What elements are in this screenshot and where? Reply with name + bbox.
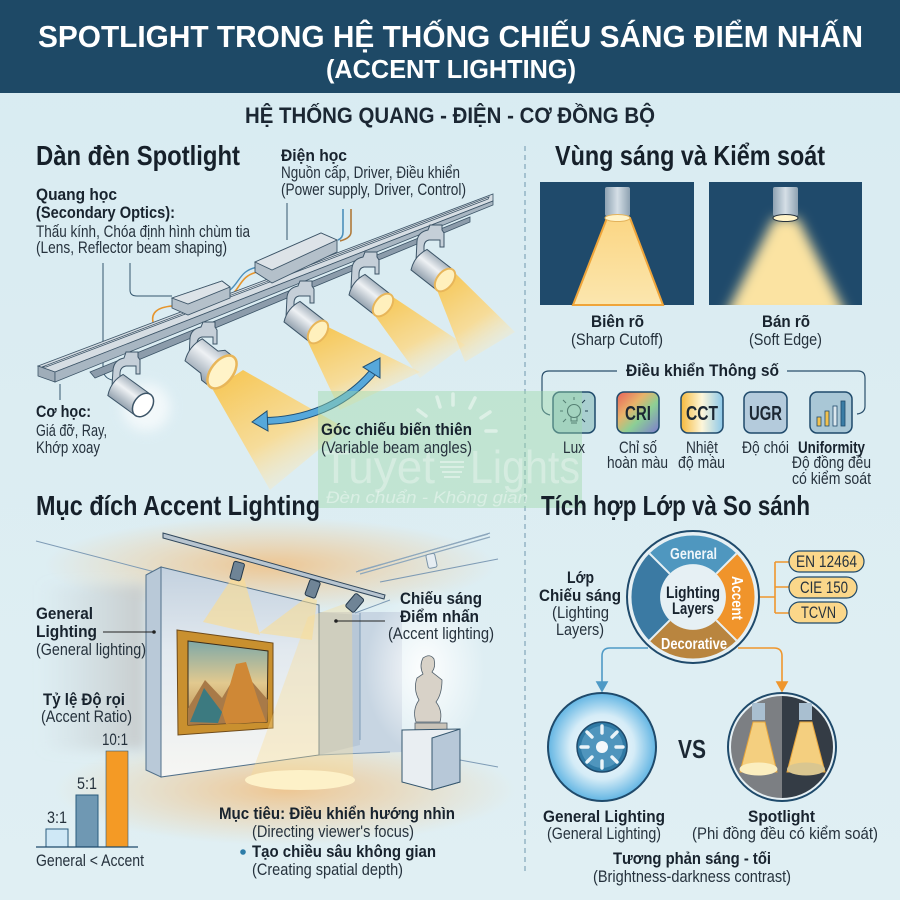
driver boxes (172, 233, 337, 315)
label: electrical: Điện học (281, 147, 347, 165)
label: mechanics (36, 403, 107, 457)
text: VS: VS (678, 734, 706, 764)
icon: CRI (617, 392, 659, 433)
label: optics: Quang học (36, 186, 117, 204)
connector: standards (760, 562, 789, 613)
parameter labels: Chỉ số (619, 439, 657, 457)
standards chips: TCVN (801, 604, 836, 622)
icon: Lux (553, 392, 595, 433)
label: contrast (593, 850, 791, 886)
watermark: Lights (470, 441, 580, 493)
label: spotlight: (Phi đồng đều có kiểm soát) (692, 825, 878, 843)
watermark: Đèn chuẩn - Không gian (326, 488, 528, 507)
label: lighting layers: Layers) (556, 621, 604, 639)
bar chart: accent ratio: 5:1 (77, 775, 97, 793)
label: accent lighting: Chiếu sáng (400, 590, 482, 608)
label: electrical: (Power supply, Driver, Control) (281, 181, 466, 199)
heading: parameter control: Điều khiển Thông số (626, 362, 779, 380)
label: lighting layers: (Lighting (552, 604, 609, 622)
parameter labels: Độ đồng đều (792, 454, 871, 472)
icon: UGR: UGR (749, 403, 782, 425)
arrow: to spotlight (738, 648, 787, 691)
gallery scene (36, 517, 515, 845)
donut: lighting layers: General (670, 546, 717, 563)
bar chart: accent ratio: (Accent Ratio) (41, 708, 132, 726)
label: accent lighting: (Accent lighting) (388, 625, 494, 643)
panel: light zones and control (540, 140, 871, 488)
parameter labels: Uniformity (798, 439, 866, 457)
arrow: to general lighting (597, 648, 648, 691)
label: electrical: Nguồn cấp, Driver, Điều khiển (281, 164, 460, 182)
donut: lighting layers: Accent (728, 576, 745, 621)
label: Lux: Lux (563, 439, 586, 457)
watermark (318, 391, 582, 508)
heading: Vùng sáng và Kiểm soát: Vùng sáng và Kiểm soát (555, 140, 825, 171)
icon: UGR (744, 392, 787, 433)
donut: lighting layers (627, 531, 759, 663)
heading: Dàn đèn Spotlight: Dàn đèn Spotlight (36, 140, 240, 171)
track rail (38, 194, 493, 382)
bar chart: accent ratio: 10:1 (102, 731, 128, 749)
subtitle: HỆ THỐNG QUANG - ĐIỆN - CƠ ĐỒNG BỘ (245, 102, 655, 128)
gallery wall (146, 567, 319, 777)
bar chart: accent ratio: General < Accent (36, 852, 144, 870)
label: general lighting (543, 808, 665, 843)
label: contrast: (Brightness-darkness contrast) (593, 868, 791, 886)
label: variable beam angles (321, 421, 472, 457)
label: lighting layers (539, 569, 621, 639)
parameter labels: hoàn màu (607, 454, 668, 472)
label: electrical (281, 147, 466, 199)
donut: lighting layers: Lighting (666, 584, 720, 602)
label: soft edge: Bán rõ (762, 313, 810, 331)
arrow: variable beam angle (252, 358, 380, 431)
track with spotlights (163, 533, 385, 613)
label: mechanics: Khớp xoay (36, 439, 101, 457)
label: general lighting: (General lighting) (36, 641, 146, 659)
text block: goals: Mục tiêu: Điều khiển hướng nhìn (219, 805, 455, 823)
parameter controls (542, 362, 871, 488)
standards chips: CIE 150 (800, 579, 848, 597)
label: optics (36, 186, 251, 257)
label: sharp cutoff (571, 313, 663, 349)
donut: lighting layers: Layers (672, 600, 714, 618)
label: optics: Thấu kính, Chóa định hình chùm tia (36, 223, 251, 241)
label: lighting layers: Chiếu sáng (539, 587, 621, 605)
label: general lighting (36, 605, 156, 659)
label: contrast: Tương phản sáng - tối (613, 850, 771, 868)
icon: spotlight comparison (728, 693, 836, 801)
leaders and wires (60, 203, 351, 400)
label: accent lighting (334, 590, 494, 643)
title banner: SPOTLIGHT TRONG HỆ THỐNG CHIẾU SÁNG ĐIỂM NHẤN (38, 18, 863, 54)
panel: layer integration and comparison (539, 531, 878, 886)
parameter labels: Độ chói (742, 439, 789, 457)
bar chart: accent ratio (36, 691, 144, 870)
text block: goals (219, 805, 455, 879)
icon: CRI: CRI (625, 403, 651, 425)
label: mechanics: Cơ học: (36, 403, 91, 421)
panel: purpose of accent lighting (36, 517, 515, 879)
icon: CCT: CCT (686, 403, 718, 425)
diagram: soft edge (709, 182, 862, 318)
light beams (213, 273, 515, 490)
far track (358, 534, 490, 574)
title banner: (ACCENT LIGHTING) (326, 54, 576, 84)
standards chips (789, 551, 864, 623)
panel: spotlight rig (36, 140, 515, 490)
label: soft edge: (Soft Edge) (749, 331, 822, 349)
watermark: Tuyet (322, 441, 435, 493)
label: sharp cutoff: Biên rõ (591, 313, 644, 331)
bar chart: accent ratio: Tỷ lệ Độ rọi (43, 691, 125, 709)
heading: Tích hợp Lớp và So sánh: Tích hợp Lớp và So sánh (541, 490, 810, 521)
spotlight fixtures (99, 225, 459, 441)
parameter labels: có kiểm soát (792, 470, 871, 488)
label: soft edge (749, 313, 822, 349)
parameter labels: Nhiệt (686, 439, 718, 457)
text block: goals: (Creating spatial depth) (252, 861, 403, 879)
statue on pedestal (402, 656, 460, 790)
floor light pool (245, 770, 355, 790)
heading: Mục đích Accent Lighting: Mục đích Accent Lighting (36, 490, 320, 521)
label: lighting layers: Lớp (567, 569, 594, 587)
accent beams (203, 578, 353, 778)
label: general lighting: General (36, 605, 93, 623)
icon: CCT (681, 392, 723, 433)
parameter labels (607, 439, 871, 488)
label: variable beam angles: (Variable beam angles) (321, 439, 472, 457)
icon: Uniformity (810, 392, 852, 433)
label: general lighting: General Lighting (543, 808, 665, 826)
label: spotlight: Spotlight (748, 808, 815, 826)
label: sharp cutoff: (Sharp Cutoff) (571, 331, 663, 349)
title banner (0, 0, 900, 93)
label: general lighting: Lighting (36, 623, 97, 641)
label: variable beam angles: Góc chiếu biến thiên (321, 421, 472, 439)
label: spotlight (692, 808, 878, 843)
parameter labels: độ màu (678, 454, 725, 472)
standards chips: EN 12464 (796, 553, 857, 571)
donut: lighting layers: Decorative (661, 636, 727, 653)
diagram: sharp cutoff (540, 182, 694, 305)
painting (177, 630, 273, 735)
label: optics: (Secondary Optics): (36, 204, 175, 222)
label: accent lighting: Điểm nhấn (400, 608, 479, 626)
text block: goals: Tạo chiều sâu không gian (252, 843, 436, 861)
text block: goals: (Directing viewer's focus) (252, 823, 414, 841)
label: optics: (Lens, Reflector beam shaping) (36, 239, 227, 257)
label: mechanics: Giá đỡ, Ray, (36, 422, 107, 440)
label: general lighting: (General Lighting) (547, 825, 661, 843)
icon: general lighting disc (548, 693, 656, 801)
bar chart: accent ratio: 3:1 (47, 809, 67, 827)
